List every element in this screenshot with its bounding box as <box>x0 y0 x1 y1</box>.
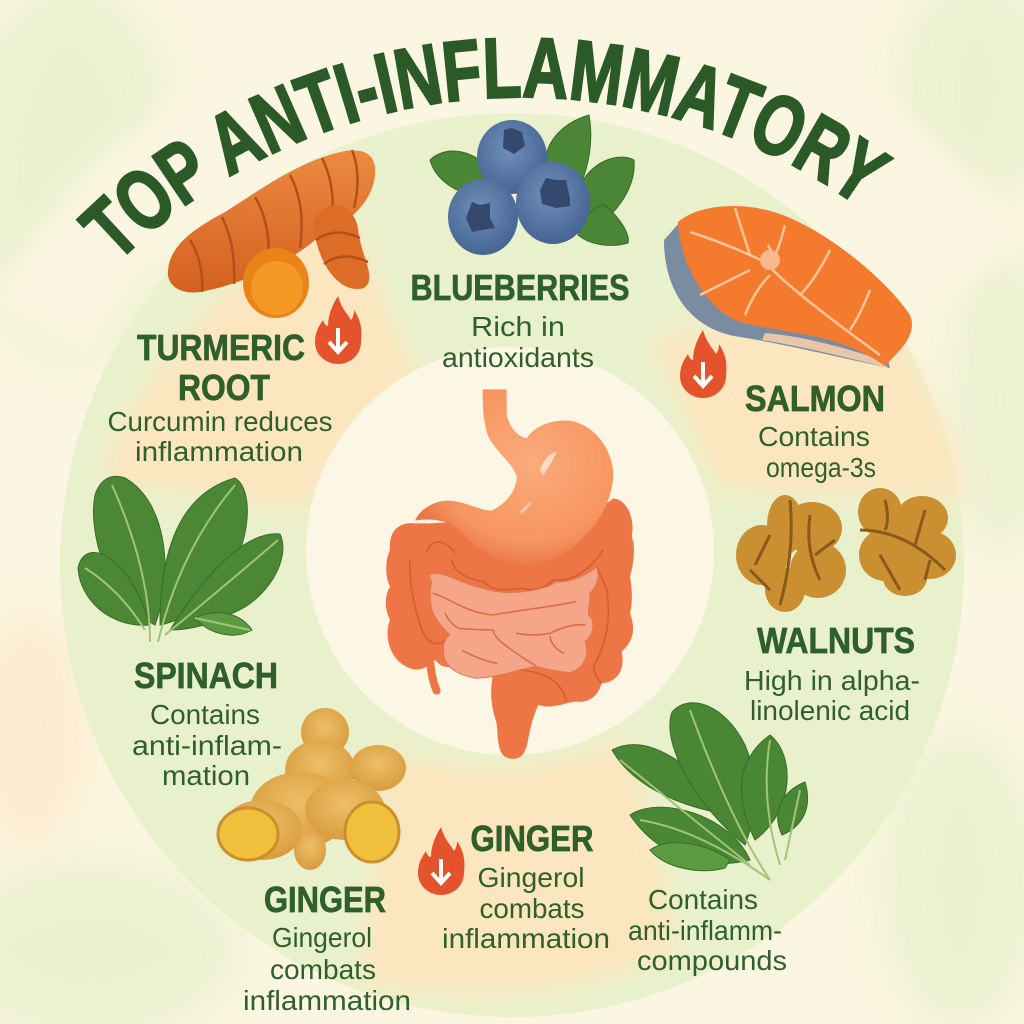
label: ginger left: inflammation <box>243 985 411 1016</box>
label: spinach: SPINACH <box>134 655 278 696</box>
label: ginger left: Gingerol <box>272 922 372 953</box>
label: spinach right: Contains <box>648 884 758 915</box>
label: blueberries: BLUEBERRIES <box>410 267 630 308</box>
label: spinach <box>132 655 282 791</box>
label: walnuts: linolenic acid <box>750 695 910 726</box>
title: TOP ANTI-INFLAMMATORY <box>76 38 895 255</box>
salmon illustration <box>664 206 912 368</box>
label: turmeric root: ROOT <box>178 367 270 408</box>
label: blueberries <box>410 267 630 373</box>
spinach right illustration <box>612 703 808 880</box>
label: spinach: mation <box>162 760 250 791</box>
label: walnuts <box>744 620 920 726</box>
label: ginger center <box>442 818 610 954</box>
label: walnuts: WALNUTS <box>757 620 915 661</box>
esophagus and stomach <box>415 389 613 564</box>
icon: flame turmeric <box>315 296 361 364</box>
label: turmeric root: inflammation <box>135 436 303 467</box>
illustration: digestive system <box>386 389 634 759</box>
label: ginger left: GINGER <box>264 879 386 920</box>
label: ginger left: combats <box>270 954 376 985</box>
icon: flame salmon <box>680 330 726 398</box>
blueberries illustration <box>430 115 634 255</box>
ginger illustration <box>218 708 406 870</box>
small intestine <box>429 567 598 678</box>
label: turmeric root: TURMERIC <box>137 327 305 368</box>
label: ginger center: inflammation <box>442 923 610 954</box>
large intestine <box>386 498 634 759</box>
label: turmeric root <box>108 327 332 467</box>
label: spinach: Contains <box>150 699 260 730</box>
label: blueberries: Rich in <box>471 311 565 342</box>
label: blueberries: antioxidants <box>442 342 594 373</box>
turmeric illustration <box>168 150 375 318</box>
label: spinach right <box>628 884 787 976</box>
label: spinach right: compounds <box>637 945 787 976</box>
label: spinach right: anti-inflamm- <box>628 915 782 946</box>
label: salmon: omega-3s <box>766 452 876 483</box>
label: ginger center: GINGER <box>470 818 594 859</box>
label: walnuts: High in alpha- <box>744 665 920 696</box>
label: salmon <box>745 378 885 483</box>
label: ginger center: Gingerol <box>478 862 584 893</box>
icon: flame ginger <box>418 827 464 895</box>
label: ginger center: combats <box>480 893 584 924</box>
label: spinach: anti-inflam- <box>132 730 282 761</box>
label: salmon: Contains <box>758 421 870 452</box>
label: ginger left <box>243 879 411 1016</box>
label: turmeric root: Curcumin reduces <box>108 406 332 437</box>
walnuts illustration <box>736 488 956 612</box>
label: salmon: SALMON <box>745 378 885 419</box>
spinach left illustration <box>78 476 283 642</box>
